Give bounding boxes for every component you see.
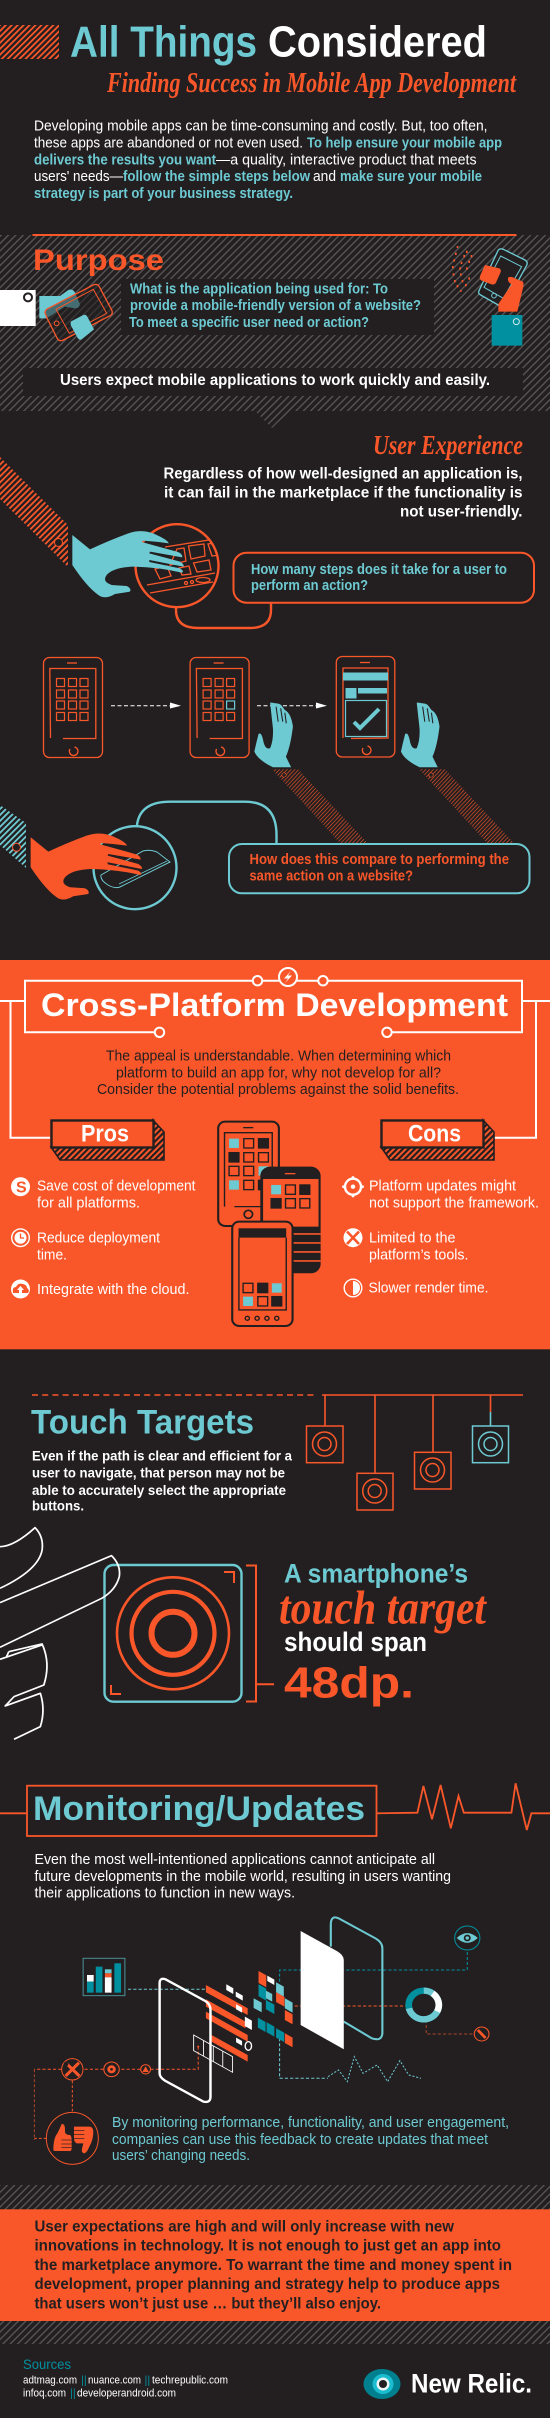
- intro text block: and: [313, 168, 336, 185]
- icon: large touch target: [104, 1565, 274, 1702]
- cross-platform intro text: The appeal is understandable. When determining which: [106, 1048, 451, 1065]
- conclusion text: that users won’t just use … but they’ll also enjoy.: [34, 2295, 381, 2312]
- heading: cross-platform development: Cross-Platform Development: [41, 987, 508, 1023]
- icon: teal hand tapping: [72, 531, 184, 597]
- dashed connectors: [34, 1951, 474, 2140]
- cons list: platform’s tools.: [369, 1246, 468, 1263]
- cross-platform intro text: Consider the potential problems against the solid benefits.: [97, 1081, 459, 1098]
- intro text block: strategy is part of your business strategy.: [34, 185, 293, 202]
- callout: 48dp stat: should span: [284, 1627, 427, 1657]
- pros list: Reduce deployment: [37, 1230, 161, 1247]
- user experience text: not user-friendly.: [400, 504, 522, 521]
- question text box: To meet a specific user need or action?: [129, 315, 369, 331]
- monitoring feedback text: By monitoring performance, functionality, and user engagement,: [112, 2114, 509, 2131]
- title second part: Considered: [268, 18, 487, 67]
- pros list: for all platforms.: [37, 1195, 140, 1212]
- cons list: Limited to the: [369, 1230, 456, 1247]
- monitoring text: Even the most well-intentioned applications cannot anticipate all: [34, 1851, 435, 1868]
- sources: ||: [81, 2375, 87, 2387]
- conclusion text: User expectations are high and will only increase with new: [34, 2219, 455, 2236]
- callout: 48dp stat: touch target: [279, 1581, 487, 1634]
- icon: target box 3: [414, 1452, 451, 1489]
- icon: half circle: [344, 1279, 362, 1297]
- sources: [23, 2357, 228, 2400]
- icon: tools: [344, 1228, 362, 1247]
- phone: keyboard device: [260, 1167, 321, 1273]
- intro text block: To help ensure your mobile app: [307, 134, 502, 152]
- callout: 48dp stat: [279, 1559, 487, 1707]
- panel: conclusion: [0, 2185, 550, 2344]
- icon: gear: [342, 1176, 364, 1197]
- icon: target box 4: [472, 1426, 508, 1463]
- intro text block: these apps are abandoned or not even used.: [34, 134, 303, 152]
- icon: cloud: [11, 1280, 30, 1298]
- pros list: [11, 1177, 196, 1298]
- sources: Sources: [23, 2357, 71, 2372]
- user experience text: it can fail in the marketplace if the functionality is: [164, 484, 522, 501]
- panel: touch targets: [0, 1395, 523, 1739]
- sources: developerandroid.com: [77, 2388, 176, 2400]
- panel: user experience: [0, 430, 534, 909]
- cons label: Cons: [408, 1121, 461, 1148]
- intro text block: delivers the results you want: [34, 152, 216, 169]
- intro text block: [34, 118, 502, 202]
- conclusion text: development, proper planning and strategy help to produce apps: [34, 2276, 500, 2293]
- cons list: [342, 1176, 539, 1297]
- heading: monitoring/updates: Monitoring/Updates: [33, 1790, 365, 1828]
- icon: eye: [455, 1926, 480, 1950]
- question text box: provide a mobile-friendly version of a website?: [130, 298, 421, 314]
- icon: target box 1: [306, 1426, 343, 1463]
- logo: new relic: [364, 2369, 532, 2399]
- icon: hand holding phone left: [0, 284, 112, 341]
- icon: orange hand: [31, 833, 142, 900]
- heading frame with pulse line: [0, 1783, 550, 1836]
- heading frame: [0, 968, 550, 1138]
- logo: new relic: New Relic.: [411, 2369, 532, 2399]
- intro text block: make sure your mobile: [340, 168, 482, 185]
- monitoring feedback text: users’ changing needs.: [112, 2147, 250, 2164]
- sources: ||: [70, 2388, 76, 2400]
- illustration: arm with striped sleeve: [0, 457, 68, 567]
- monitoring text: [34, 1851, 451, 1901]
- icon: pointing hand 2 with sleeve: [401, 703, 514, 843]
- intro text block: users' needs—: [34, 168, 123, 185]
- icon: warning: [141, 2065, 150, 2074]
- conclusion text: innovations in technology. It is not enough to just get an app into: [34, 2238, 501, 2255]
- pros list: Save cost of development: [37, 1178, 196, 1195]
- illustration: phone step 2: [190, 658, 249, 758]
- icon: thumbs up and down: [46, 2112, 98, 2164]
- callout: compare to website: [229, 844, 530, 893]
- callout: 48dp stat: 48dp.: [284, 1658, 414, 1707]
- pros label: Pros: [81, 1121, 129, 1148]
- icon: dollar: S: [16, 1180, 27, 1196]
- sources: nuance.com: [88, 2375, 141, 2387]
- illustration: phone step 3: [336, 656, 395, 757]
- layer: orange bars and white chips: [206, 1984, 252, 2062]
- callout: how many steps: [176, 553, 534, 628]
- cons label: [381, 1120, 494, 1160]
- icon: wrench circle: [34, 2059, 83, 2138]
- intro text block: —a quality, interactive product that meets: [216, 152, 477, 169]
- illustration: phone step 1: [44, 658, 102, 758]
- title: All Things: [70, 18, 257, 67]
- pros list: Integrate with the cloud.: [37, 1281, 190, 1298]
- heading: touch targets: Touch Targets: [31, 1403, 254, 1441]
- pros list: time.: [37, 1246, 67, 1263]
- callout: compare to website: How does this compare to performing the: [250, 852, 509, 868]
- sources: adtmag.com: [23, 2375, 77, 2387]
- panel: purpose: [0, 234, 550, 428]
- sources: infoq.com: [23, 2388, 66, 2400]
- illustration: finger outlines: [0, 1528, 120, 1739]
- phone: front: [232, 1222, 293, 1326]
- phone: tall grid: [218, 1122, 279, 1226]
- connector lines: [32, 1395, 523, 1473]
- heading: purpose: Purpose: [33, 244, 164, 277]
- touch targets text: [32, 1448, 292, 1514]
- layer: white screen: [301, 1931, 344, 2049]
- callout: compare to website: same action on a website?: [250, 869, 413, 885]
- statement box: [23, 368, 523, 396]
- intro text block: Developing mobile apps can be time-consuming and costly. But, too often,: [34, 118, 488, 135]
- callout: how many steps: How many steps does it take for a user to: [251, 562, 507, 578]
- cons list: Slower render time.: [368, 1280, 488, 1297]
- monitoring feedback text: [112, 2114, 509, 2164]
- arrow: step 2 to 3: [257, 702, 327, 708]
- monitoring feedback text: companies can use this feedback to create updates that meet: [112, 2131, 489, 2148]
- decorative title stripes: [0, 25, 59, 59]
- cons list: not support the framework.: [369, 1195, 539, 1212]
- intro text block: follow the simple steps below: [123, 168, 310, 185]
- layer: back panel outline: [331, 1917, 382, 2039]
- layer: front phone outline: [160, 1979, 210, 2102]
- icon: target box 2: [357, 1473, 393, 1510]
- arrow: step 1 to 2: [111, 702, 181, 708]
- conclusion text: [34, 2219, 512, 2312]
- icon: hand holding phone right: [452, 246, 527, 346]
- monitoring text: their applications to function in new ways.: [34, 1884, 295, 1901]
- illustration: website circle with hand: [0, 802, 276, 909]
- panel: monitoring and updates: [0, 1783, 550, 2164]
- panel: cross-platform development: [0, 960, 550, 1349]
- icon: dollar: [11, 1177, 30, 1196]
- title header: [0, 18, 517, 99]
- icon: gear: [104, 2062, 119, 2077]
- chart: donut: [409, 1991, 439, 2019]
- sources: techrepublic.com: [152, 2375, 228, 2387]
- layer: wire table: [194, 2035, 233, 2072]
- callout: 48dp stat: A smartphone’s: [284, 1559, 468, 1589]
- sources: ||: [144, 2375, 150, 2387]
- icon: small wrench: [474, 2027, 489, 2041]
- diagram: exploded phone: [34, 1917, 489, 2140]
- touch targets text: Even if the path is clear and efficient for a: [32, 1448, 292, 1464]
- icon: bar chart: [83, 1958, 125, 1996]
- illustration: three phones: [218, 1122, 321, 1326]
- icon: clock: [12, 1229, 29, 1246]
- illustration: magnified tablet circle: [136, 524, 220, 607]
- icon: pointing hand 1 with sleeve: [254, 703, 368, 843]
- touch targets text: user to navigate, that person may not be: [32, 1465, 285, 1481]
- cross-platform intro text: platform to build an app for, why not develop for all?: [116, 1064, 441, 1081]
- touch targets text: able to accurately select the appropriate: [32, 1482, 286, 1498]
- monitoring text: future developments in the mobile world, resulting in users wanting: [34, 1868, 451, 1885]
- user experience text: Regardless of how well-designed an application is,: [164, 465, 522, 482]
- conclusion text: the marketplace anymore. To warrant the time and money spent in: [34, 2257, 512, 2274]
- touch targets text: buttons.: [32, 1498, 84, 1514]
- cons list: Platform updates might: [369, 1178, 517, 1195]
- pros label: [51, 1120, 164, 1160]
- statement box: Users expect mobile applications to work quickly and easily.: [60, 372, 490, 389]
- cross-platform intro text: [97, 1048, 459, 1098]
- layer: colour tiles: [254, 1971, 293, 2047]
- question text box: [121, 279, 434, 335]
- user experience text: [164, 465, 522, 521]
- question text box: What is the application being used for: To: [130, 281, 388, 297]
- callout: how many steps: perform an action?: [251, 578, 368, 594]
